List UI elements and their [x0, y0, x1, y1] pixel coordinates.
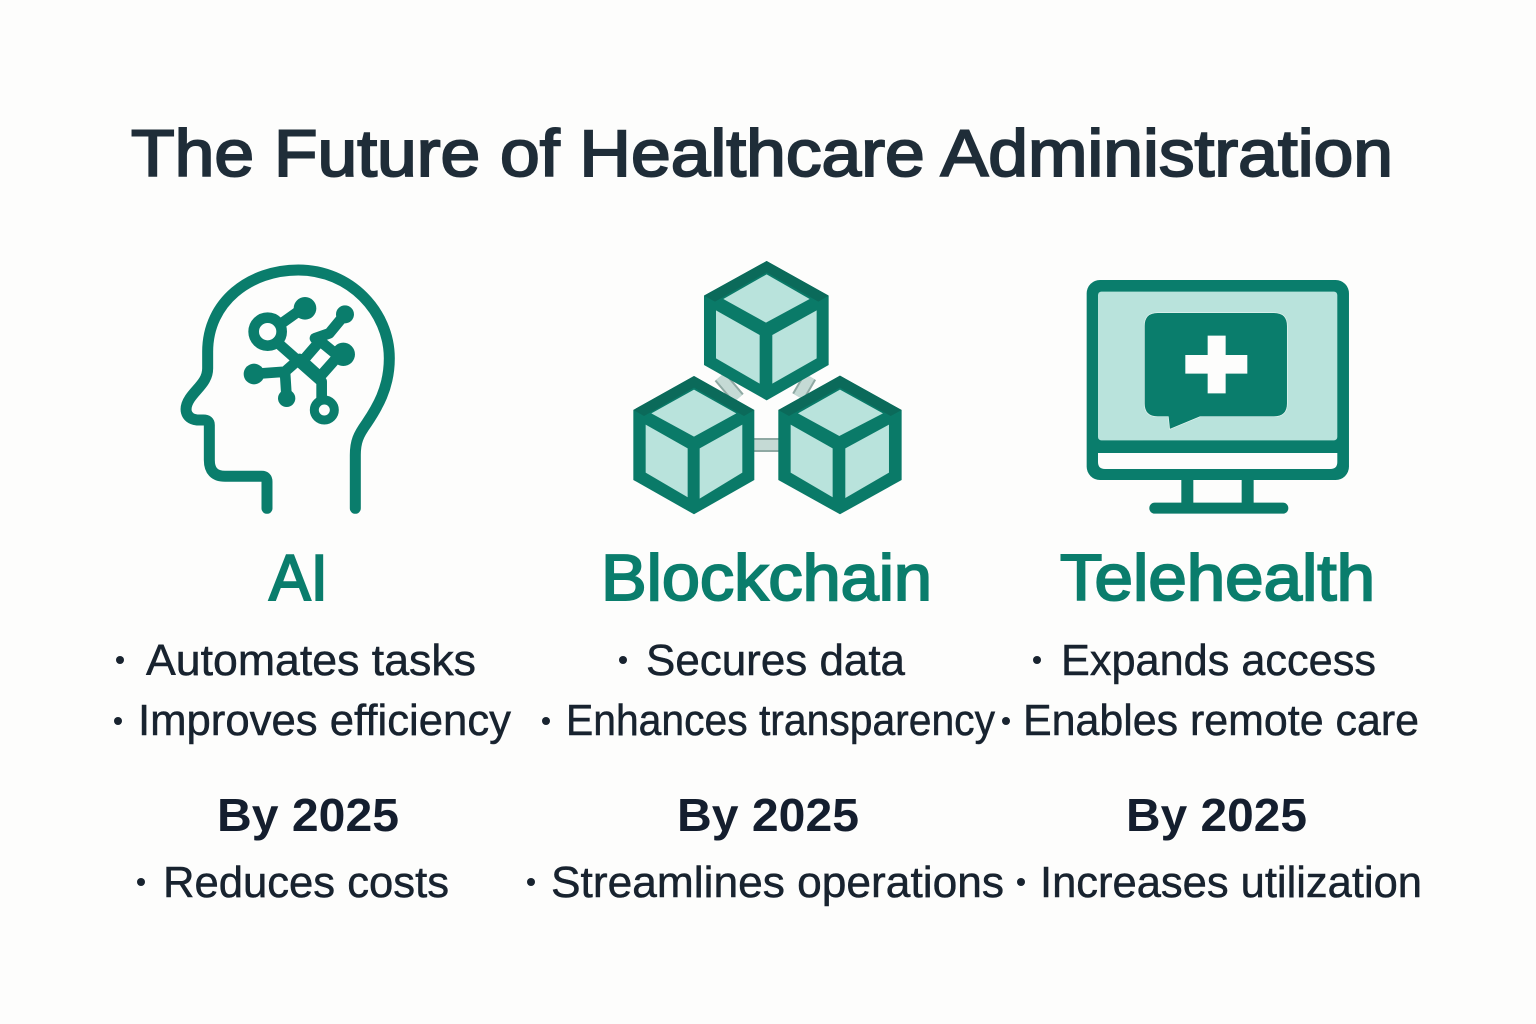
chat bubble [1144, 313, 1287, 429]
subheading: By 2025: By 2025 [677, 789, 859, 841]
heading: Telehealth: Telehealth [1060, 541, 1375, 614]
bullet: Automates tasks: Automates tasks [146, 636, 476, 685]
panel: Blockchain [527, 261, 1004, 907]
panel: Telehealth [1002, 280, 1422, 907]
bullet: Enables remote care: Enables remote care [1023, 696, 1419, 745]
heading: Blockchain: Blockchain [601, 541, 932, 614]
icon: monitor with medical chat bubble [1087, 280, 1349, 514]
subheading: By 2025: By 2025 [1126, 789, 1307, 841]
panel: AI [114, 270, 511, 907]
icon: head with neural network [186, 270, 389, 508]
medical cross [1185, 336, 1247, 393]
bullet: Expands access: Expands access [1061, 636, 1376, 685]
bullet: Improves efficiency: Improves efficiency [138, 696, 511, 745]
heading: AI: AI [269, 541, 328, 614]
bullet: Enhances transparency: Enhances transparency [566, 696, 995, 745]
title: The Future of Healthcare Administration [131, 116, 1393, 190]
bullet: Reduces costs: Reduces costs [163, 858, 449, 907]
bullet: Increases utilization: Increases utilization [1040, 858, 1422, 907]
icon: linked cubes [633, 261, 902, 514]
bullet: Secures data: Secures data [646, 636, 906, 685]
bullet: Streamlines operations: Streamlines operations [551, 858, 1004, 907]
subheading: By 2025: By 2025 [217, 789, 399, 841]
